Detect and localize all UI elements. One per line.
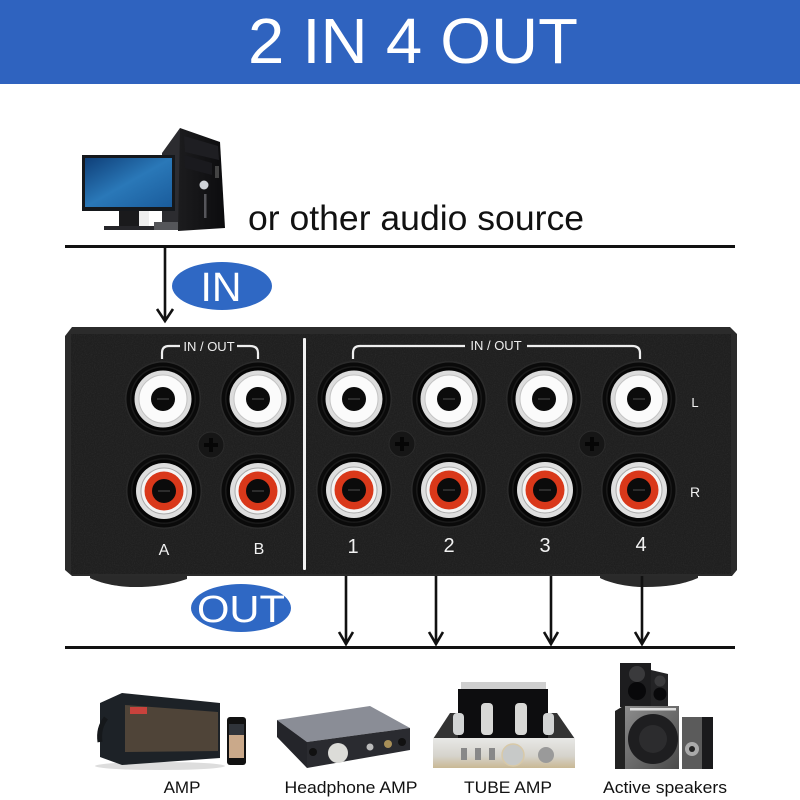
icon: tube amp xyxy=(433,682,575,768)
line: input bus xyxy=(65,245,735,248)
divider xyxy=(303,338,306,570)
badge: OUT: OUT xyxy=(197,589,285,631)
text: audio source: or other audio source xyxy=(248,199,584,238)
icon: active speakers xyxy=(615,663,713,769)
line: output bus xyxy=(65,646,735,649)
channel labels: 3 xyxy=(539,535,551,557)
bracket: A-B in/out xyxy=(162,339,258,359)
channel labels: 2 xyxy=(443,535,455,557)
bracket: 1-4 in/out: IN / OUT xyxy=(470,338,522,353)
arrow: input xyxy=(157,247,173,321)
label: AMP: AMP xyxy=(164,778,200,797)
channel labels: R xyxy=(690,484,700,500)
bracket: A-B in/out: IN / OUT xyxy=(183,339,235,354)
channel labels: 1 xyxy=(347,536,359,558)
label: Active speakers: Active speakers xyxy=(603,778,727,797)
icon: desktop computer xyxy=(82,128,225,231)
badge: IN: IN xyxy=(200,264,242,310)
channel labels: B xyxy=(254,541,264,558)
jacks: white row xyxy=(125,361,677,437)
icon: headphone amp xyxy=(277,706,410,768)
label: TUBE AMP: TUBE AMP xyxy=(464,778,552,797)
header banner xyxy=(0,0,800,84)
arrows: outputs xyxy=(339,576,649,644)
icon: guitar amp and phone xyxy=(95,693,246,770)
badge: IN xyxy=(172,262,272,310)
title: 2 IN 4 OUT xyxy=(248,5,578,77)
channel labels xyxy=(159,395,700,559)
channel labels: L xyxy=(691,395,699,410)
screws xyxy=(198,431,605,458)
jacks: red row xyxy=(126,452,677,529)
bracket: 1-4 in/out xyxy=(353,338,640,359)
device panel: switcher front xyxy=(65,327,737,587)
label: Headphone AMP: Headphone AMP xyxy=(284,778,418,797)
rubber feet xyxy=(90,575,187,587)
channel labels: 4 xyxy=(635,534,647,556)
channel labels: A xyxy=(159,542,170,559)
